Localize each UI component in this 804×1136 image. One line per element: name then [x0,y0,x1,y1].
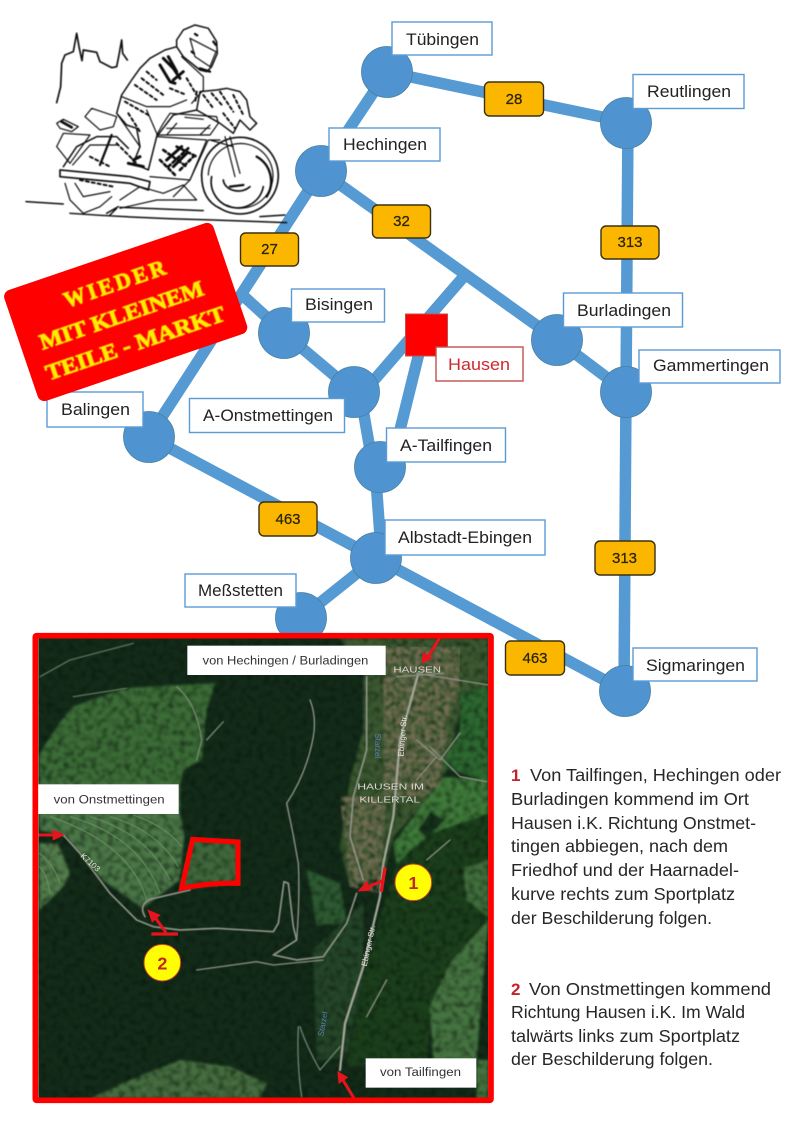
city label: A-Tailfingen: A-Tailfingen [400,436,492,455]
marker 2 [144,944,181,981]
directions text 1: 1 [511,766,520,785]
city label: Hechingen [329,128,440,161]
field stripes [39,815,182,900]
directions text 1: tingen abbiegen, nach dem [511,836,728,856]
city label: Sigmaringen [633,648,757,681]
tank [157,113,218,135]
label: von Hechingen / Burladingen: von Hechingen / Burladingen [203,654,368,668]
city label: Bisingen [292,289,384,322]
map place names: Starzel [373,733,382,758]
road badge 463 west [259,502,317,536]
rear wheel [63,135,137,213]
forest and village noise [38,638,488,1098]
footpeg and swingarm [120,185,197,208]
city label: Reutlingen: Reutlingen [647,82,731,101]
city label: Balingen [47,392,143,427]
arrow: turn 2 [147,909,178,934]
banner text: WIEDER [60,254,170,313]
road badge 313 south [595,541,655,575]
exhaust [60,170,150,190]
directions text 1: der Beschilderung folgen. [511,908,712,928]
label: von Hechingen / Burladingen [187,646,386,675]
map place names: HAUSEN IM [357,781,424,791]
road badge 313 north [601,226,659,259]
frame [35,636,491,1100]
map place names: K7103 [79,851,102,874]
road badge 463 east: 463 [522,650,548,667]
city label: A-Onstmettingen: A-Onstmettingen [203,406,333,425]
city label: Burladingen [564,293,682,327]
arrow: from Onstmettingen [38,829,65,841]
city label: A-Onstmettingen [190,398,344,432]
satellite map panel [35,636,491,1100]
banner text: TEILE - MARKT [42,301,229,385]
red banner [2,221,249,403]
road badge 313 north: 313 [617,234,643,251]
road badge 463 west: 463 [275,511,301,528]
seat and tail [57,108,117,163]
city label: Tübingen [392,22,492,55]
directions text 1: Von Tailfingen, Hechingen oder [530,765,781,785]
city label: Tübingen: Tübingen [406,30,479,49]
label: von Tailfingen [366,1058,476,1088]
city label: Hechingen: Hechingen [343,135,427,154]
city label: Bisingen: Bisingen [305,295,373,314]
city label: Albstadt-Ebingen: Albstadt-Ebingen [398,528,532,547]
arrow: from Hechingen [422,638,439,664]
road badge 32 [372,205,430,238]
city label: Albstadt-Ebingen [385,520,545,555]
map place names [79,664,441,1037]
label: von Onstmettingen: von Onstmettingen [54,792,165,806]
city label: Reutlingen [633,74,744,108]
road badge 463 east [506,641,564,675]
directions text 2 [511,979,771,1069]
front fork and frame [173,137,240,197]
sports field outline [182,839,238,888]
directions text 2: der Beschilderung folgen. [511,1049,713,1069]
motorcycle sketch [26,25,287,223]
banner text: MIT KLEINEM [36,275,207,355]
directions text 2: Von Onstmettingen kommend [529,979,771,999]
map place names: KILLERTAL [359,794,420,804]
road badge 27: 27 [261,241,278,258]
directions text 1: Friedhof und der Haarnadel- [511,860,739,880]
roads [40,643,488,1097]
road badge 313 south: 313 [612,550,637,567]
label: von Tailfingen: von Tailfingen [380,1065,461,1079]
road network [149,72,628,691]
marker 1 [395,864,432,901]
engine [150,137,207,180]
directions text 1: kurve rechts zum Sportplatz [511,884,735,904]
directions text 2: talwärts links zum Sportplatz [511,1026,740,1046]
directions text 2: 2 [511,980,520,999]
banner text [22,241,229,385]
marker 2: 2 [157,953,167,973]
city label: Meßstetten: Meßstetten [198,581,283,600]
arrow: turn 1 [357,868,385,892]
front wheel [202,137,278,214]
city label: Gammertingen [639,350,780,383]
city label: Sigmaringen: Sigmaringen [646,656,745,675]
marker 1: 1 [408,873,418,893]
city label: Meßstetten [185,574,296,607]
arrow: from Tailfingen [337,1071,354,1098]
map place names: Starzel [316,1011,330,1037]
Hausen marker: Hausen [448,355,510,374]
directions text 1: Hausen i.K. Richtung Onstmet- [511,813,756,833]
helmet [177,25,217,72]
city label: Burladingen: Burladingen [577,301,671,320]
road badge 32: 32 [393,213,410,230]
city label: A-Tailfingen [386,428,506,462]
Hausen marker [406,314,523,381]
aerial image [38,638,488,1098]
city label: Gammertingen: Gammertingen [653,356,769,375]
directions text 1 [511,765,781,928]
label: von Onstmettingen [38,784,179,814]
road badge 28 [484,82,544,116]
city label: Balingen: Balingen [61,400,130,419]
road lines [26,202,287,223]
road badge 28: 28 [506,91,522,108]
directions text 2: Richtung Hausen i.K. Im Wald [511,1002,745,1022]
skyline [57,33,127,103]
road badge 27 [240,233,298,266]
rider [117,47,203,170]
map place names: Ebinger Str. [396,714,409,757]
map nodes [124,46,652,716]
hand and bars [197,88,257,133]
directions text 1: Burladingen kommend im Ort [511,789,749,809]
map place names: Ebinger Str. [360,924,377,967]
map place names: HAUSEN [393,664,441,674]
